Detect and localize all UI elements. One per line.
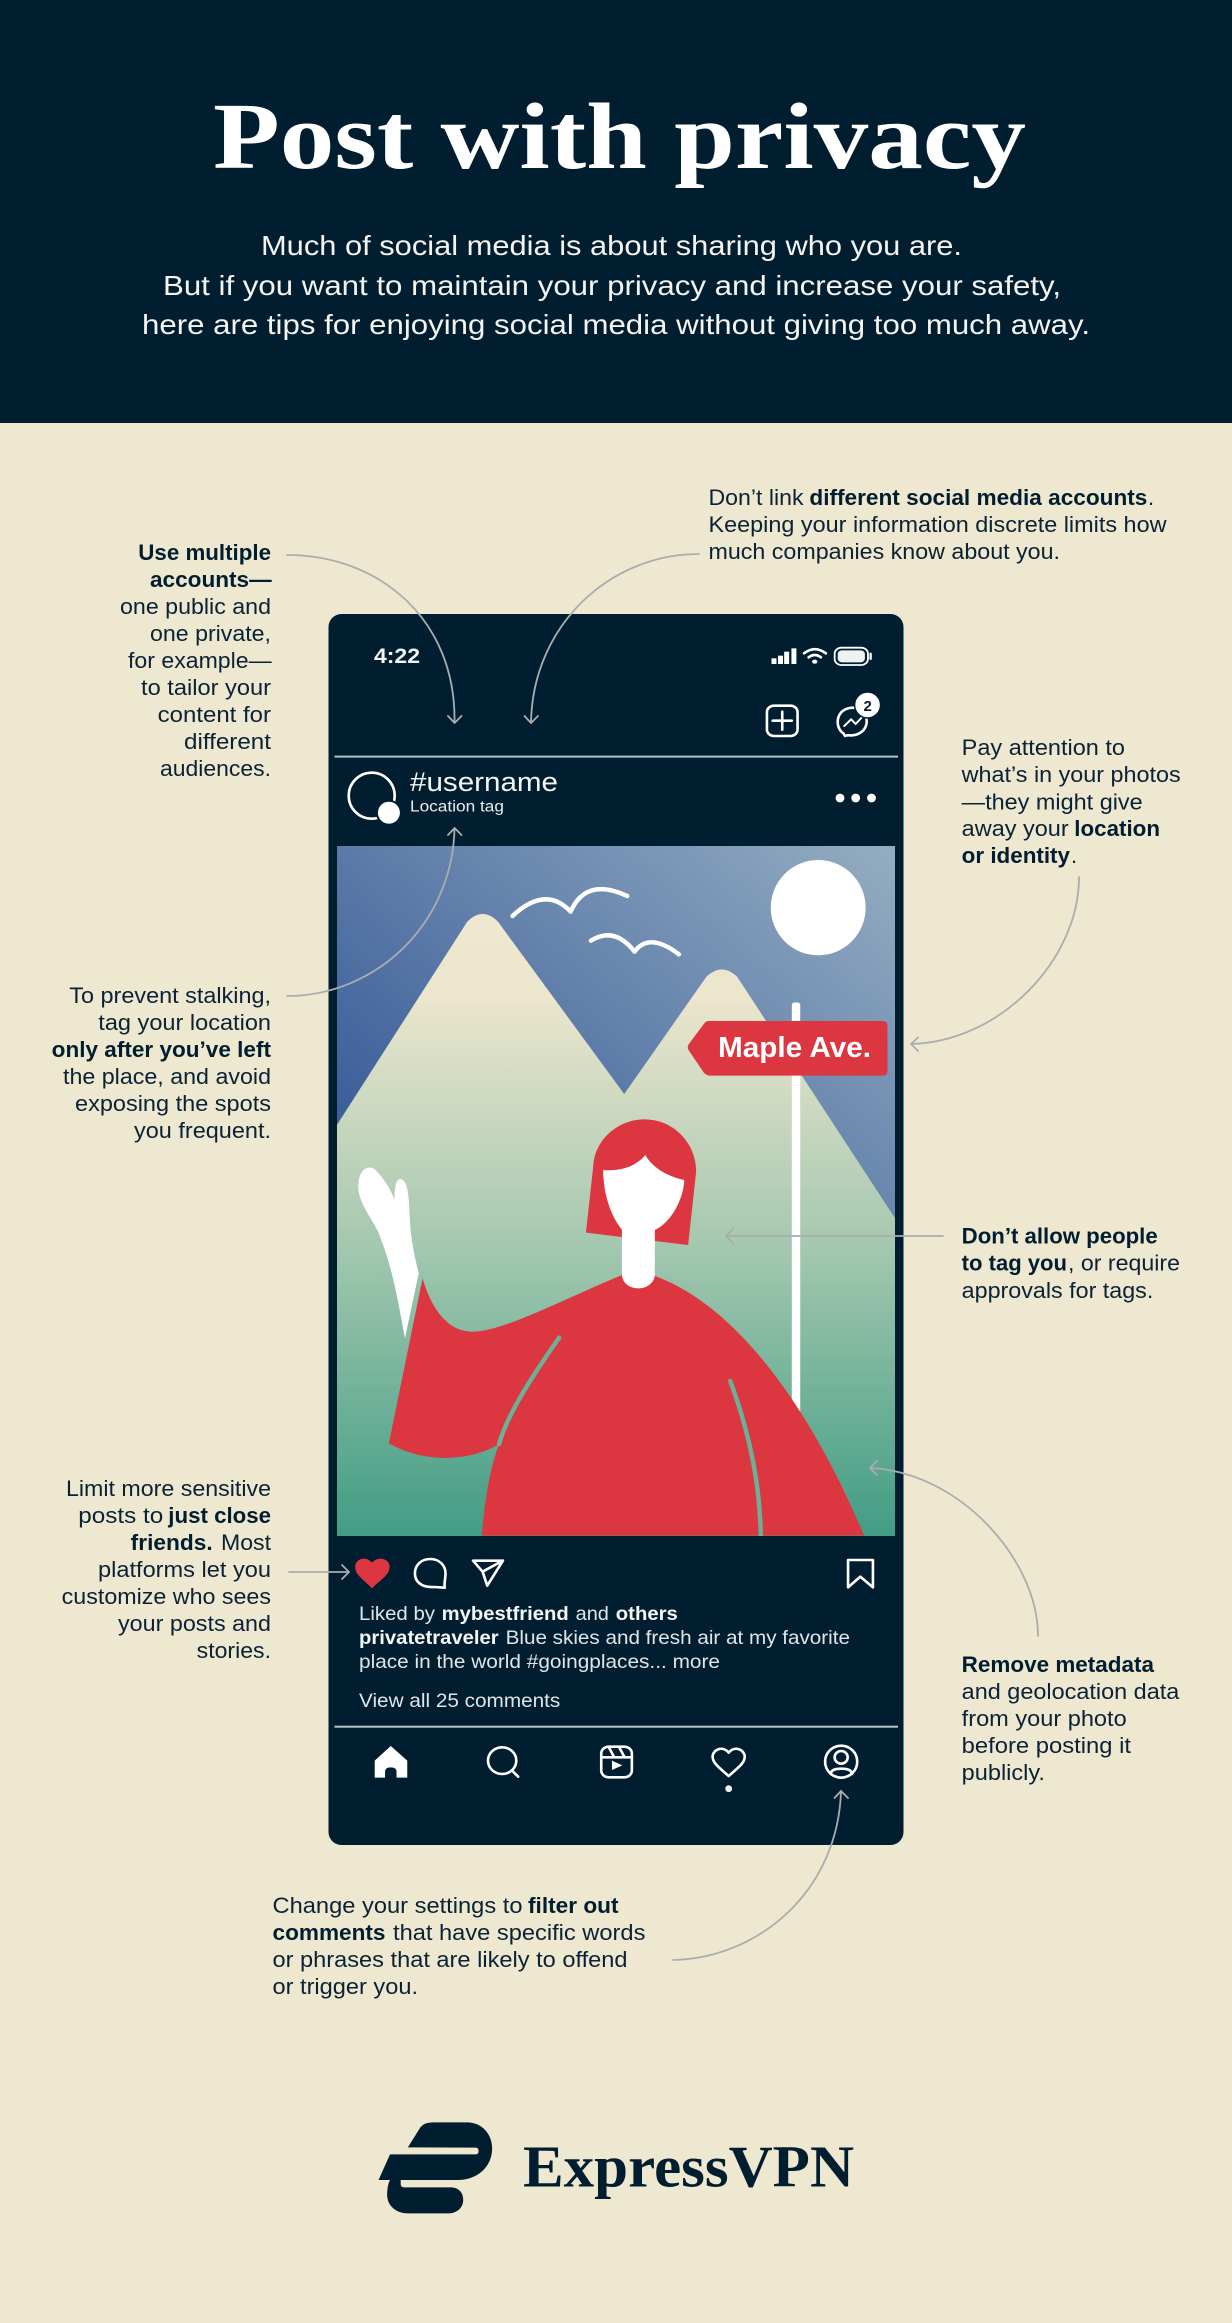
callout: use multiple accounts: to tailor your [141, 675, 271, 700]
intro text: here are tips for enjoying social media without giving too much away. [142, 309, 1090, 340]
callout: use multiple accounts: accounts— [150, 567, 272, 592]
intro text: Much of social media is about sharing who you are. [261, 230, 962, 261]
bottom navigation icons [375, 1746, 857, 1778]
callout: linked accounts: Don’t link [708, 485, 805, 510]
messenger badge count: 2 [864, 698, 872, 715]
callout: tagging [962, 1224, 1180, 1303]
callout: metadata [962, 1652, 1180, 1785]
callout: location tagging: tag your location [98, 1010, 271, 1035]
neck [622, 1223, 655, 1288]
icon: reels [601, 1747, 632, 1777]
post caption: mybestfriend [442, 1603, 569, 1625]
activity dot [725, 1785, 732, 1792]
sun [771, 860, 866, 955]
callout: use multiple accounts: content for [158, 702, 271, 727]
post caption: Liked by [359, 1603, 435, 1625]
phone mockup [328, 614, 904, 1845]
bottom divider [334, 1726, 898, 1728]
callout: photo contents: away your [962, 816, 1069, 841]
icon: heart [355, 1559, 390, 1588]
arrow: metadata [870, 1461, 1038, 1636]
callout: tagging: approvals for tags. [962, 1278, 1153, 1303]
callout: comment filter: Change your settings to [272, 1893, 522, 1918]
callout: tagging: to tag you [962, 1250, 1067, 1276]
logo wordmark: ExpressVPN [523, 2134, 854, 2200]
callout: photo contents: what’s in your photos [961, 762, 1181, 787]
callout: close friends [62, 1476, 271, 1663]
callout: metadata: before posting it [962, 1733, 1131, 1758]
callout: metadata: publicly. [962, 1760, 1045, 1785]
callout: photo contents: location [1074, 816, 1160, 841]
sky [337, 846, 895, 1218]
callout: use multiple accounts: for example— [128, 648, 272, 673]
callout: comment filter: or phrases that are likely to offend [272, 1947, 628, 1972]
arrow: location tag [287, 828, 462, 996]
callout: linked accounts: . [1148, 485, 1154, 510]
intro text: But if you want to maintain your privacy and increase your safety, [163, 270, 1061, 301]
post caption: others [616, 1603, 678, 1625]
icon: search [488, 1747, 518, 1777]
ExpressVPN logo [379, 2122, 854, 2213]
dress [389, 1275, 864, 1536]
top divider [334, 756, 898, 758]
callout: photo contents [961, 735, 1181, 868]
icon: home [375, 1746, 407, 1778]
callout: close friends: Limit more sensitive [66, 1476, 271, 1501]
arrow: multiple accounts [287, 555, 462, 723]
icon: activity heart [713, 1749, 745, 1776]
callout: close friends: friends. [131, 1530, 213, 1555]
arrow: close friends [289, 1565, 349, 1579]
avatar [349, 773, 402, 826]
callout: comment filter: filter out [528, 1893, 619, 1918]
icon: new post [767, 706, 798, 736]
face [603, 1155, 684, 1230]
icon: send [473, 1561, 503, 1586]
callout: location tagging [52, 983, 272, 1143]
title: Post with privacy [213, 85, 1026, 189]
post caption: View all 25 comments [359, 1690, 561, 1712]
callout: close friends: posts to [78, 1503, 163, 1528]
hair [586, 1119, 696, 1245]
callout: location tagging: To prevent stalking, [69, 983, 271, 1008]
callout: photo contents: or identity [962, 843, 1071, 868]
arrow: comment filter [673, 1791, 848, 1960]
photo illustration [337, 846, 895, 1537]
post caption: Blue skies and fresh air at my favorite [506, 1627, 850, 1649]
callout: location tagging: exposing the spots [75, 1091, 271, 1116]
callout: tagging: Don’t allow people [962, 1224, 1158, 1248]
callout: use multiple accounts [120, 540, 272, 781]
status icons [772, 648, 872, 665]
location tag: Location tag [410, 798, 504, 816]
icon: bookmark [848, 1560, 873, 1587]
icon: profile [825, 1746, 857, 1778]
callout: close friends: your posts and [118, 1611, 271, 1636]
callout: photo contents: . [1071, 843, 1077, 868]
post caption: and [576, 1603, 609, 1625]
callout: use multiple accounts: audiences. [160, 756, 271, 781]
post caption: place in the world #goingplaces... more [359, 1651, 720, 1673]
arrow: photo contents [911, 877, 1079, 1051]
post caption [359, 1603, 850, 1712]
callout: metadata: from your photo [962, 1706, 1127, 1731]
callout: close friends: platforms let you [98, 1557, 271, 1582]
callout: metadata: and geolocation data [962, 1679, 1180, 1704]
callout: close friends: just close [167, 1503, 271, 1528]
arrow: tagging [726, 1229, 943, 1243]
icon: more dots [836, 794, 876, 802]
callout: location tagging: the place, and avoid [63, 1064, 271, 1089]
callout: metadata: Remove metadata [962, 1652, 1155, 1677]
callout: comment filter: or trigger you. [272, 1974, 418, 1999]
callout: linked accounts [708, 485, 1167, 564]
callout: location tagging: only after you’ve left [52, 1037, 272, 1062]
intro text [142, 230, 1090, 340]
callout: comment filter: comments [272, 1920, 386, 1945]
mountains [337, 914, 895, 1537]
sign pole [792, 1002, 800, 1413]
street sign [688, 1021, 887, 1076]
callout: comment filter [272, 1893, 645, 1999]
dress fold lines [499, 1338, 761, 1537]
callout: use multiple accounts: Use multiple [138, 540, 271, 565]
logo mark [379, 2122, 492, 2213]
arrow: linked accounts [524, 554, 699, 723]
callout: linked accounts: Keeping your information discrete limits how [708, 512, 1167, 537]
callout: tagging: , or require [1068, 1250, 1180, 1276]
callout: location tagging: you frequent. [134, 1118, 271, 1143]
callout: close friends: Most [221, 1530, 271, 1555]
phone body [328, 614, 904, 1845]
username: #username [410, 767, 558, 797]
sign text: Maple Ave. [718, 1032, 871, 1064]
icon: messenger with badge [838, 692, 881, 736]
callout: photo contents: —they might give [962, 790, 1143, 814]
birds [512, 889, 679, 954]
callout: photo contents: Pay attention to [962, 735, 1125, 760]
header panel [0, 0, 1232, 423]
callout: use multiple accounts: one public and [120, 594, 271, 619]
post caption: privatetraveler [359, 1627, 499, 1649]
callout: use multiple accounts: different [184, 729, 271, 754]
post action icons [355, 1559, 873, 1588]
icon: comment [415, 1559, 446, 1588]
status bar time: 4:22 [374, 645, 420, 668]
callout: close friends: stories. [197, 1638, 271, 1663]
callout: linked accounts: much companies know about you. [708, 539, 1060, 564]
callout: close friends: customize who sees [62, 1584, 271, 1609]
raised hand [358, 1167, 419, 1338]
callout: linked accounts: different social media accounts [809, 485, 1147, 510]
callout: comment filter: that have specific words [393, 1920, 645, 1945]
callout: use multiple accounts: one private, [150, 621, 271, 646]
